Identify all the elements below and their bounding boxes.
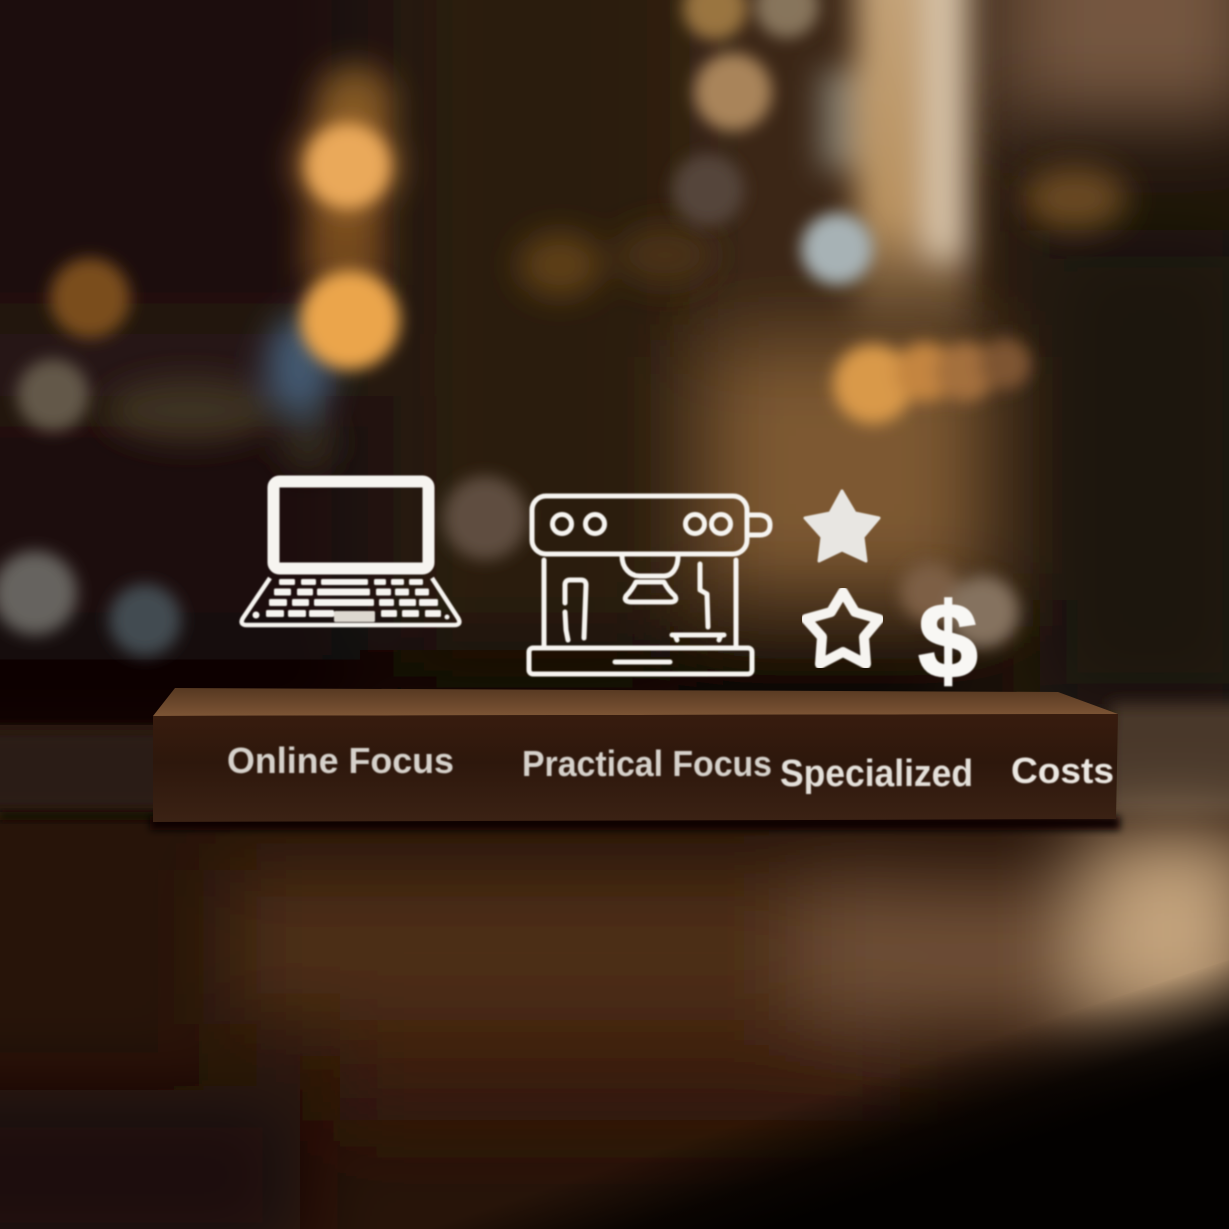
wooden table surface bbox=[0, 704, 1229, 1229]
label: Specialized: Specialized bbox=[780, 753, 973, 795]
label: Costs: Costs bbox=[1011, 750, 1114, 791]
block top face bbox=[153, 688, 1118, 716]
label: Online Focus: Online Focus bbox=[227, 740, 454, 781]
label: Practical Focus: Practical Focus bbox=[522, 743, 772, 784]
bokeh lights bbox=[0, 0, 1031, 656]
icon: outlined star bbox=[806, 592, 879, 664]
block front face bbox=[153, 714, 1118, 822]
icon: dollar sign: $ bbox=[919, 582, 977, 700]
block shadow bbox=[150, 816, 1120, 830]
icon: filled star bbox=[805, 491, 879, 561]
wooden block base bbox=[150, 688, 1120, 830]
icon: laptop bbox=[242, 482, 459, 625]
icon: espresso machine bbox=[529, 496, 770, 674]
